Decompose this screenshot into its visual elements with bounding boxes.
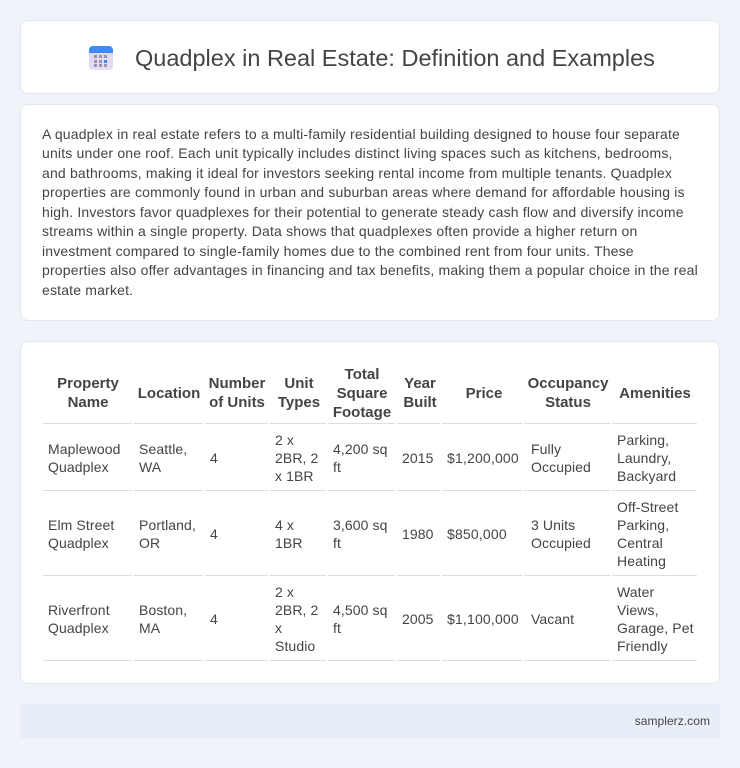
text block: description: estate market. <box>42 282 133 298</box>
row: Elm Street Quadplex: 4 x <box>275 517 294 533</box>
row: Riverfront Quadplex: ft <box>333 620 341 636</box>
row: Maplewood Quadplex: Laundry, <box>617 450 671 466</box>
row: Riverfront Quadplex: MA <box>139 620 160 636</box>
row: Riverfront Quadplex: Garage, Pet <box>617 620 694 636</box>
row: Elm Street Quadplex: 3,600 sq <box>333 517 388 533</box>
table rows <box>43 423 697 661</box>
row: Riverfront Quadplex: Water <box>617 584 654 600</box>
table header: Footage <box>333 404 391 421</box>
row: Riverfront Quadplex: Boston, <box>139 602 187 618</box>
table header: Types <box>278 394 320 411</box>
row: Maplewood Quadplex: Occupied <box>531 459 591 475</box>
row: Elm Street Quadplex: Central <box>617 535 663 551</box>
title: Quadplex in Real Estate: Definition and Examples <box>135 45 655 71</box>
row: Maplewood Quadplex <box>48 432 676 484</box>
row: Elm Street Quadplex: Portland, <box>139 517 196 533</box>
table header: Amenities <box>619 385 691 402</box>
row: Elm Street Quadplex: 4 <box>210 526 218 542</box>
table header: Location <box>138 385 200 402</box>
table header: Unit <box>284 375 314 392</box>
row: Maplewood Quadplex: $1,200,000 <box>447 450 519 466</box>
panel: header card <box>20 20 720 94</box>
row: Riverfront Quadplex: 2 x <box>275 584 294 600</box>
row: Maplewood Quadplex: 2BR, 2 <box>275 450 318 466</box>
row: Elm Street Quadplex: Quadplex <box>48 535 109 551</box>
row: Riverfront Quadplex: Friendly <box>617 638 668 654</box>
table header: Occupancy <box>528 375 608 392</box>
row: Riverfront Quadplex: Vacant <box>531 611 574 627</box>
row: Riverfront Quadplex: 2BR, 2 <box>275 602 318 618</box>
row: Riverfront Quadplex: Studio <box>275 638 315 654</box>
row: Elm Street Quadplex: Heating <box>617 553 666 569</box>
table header <box>57 366 691 421</box>
row: Riverfront Quadplex: Riverfront <box>48 602 110 618</box>
row: Riverfront Quadplex: 4 <box>210 611 218 627</box>
row: Maplewood Quadplex: Quadplex <box>48 459 109 475</box>
table header: Status <box>545 394 591 411</box>
row: Elm Street Quadplex: Off-Street <box>617 499 678 515</box>
text block: description: streams within a single property. Data shows that quadplexes often provide a higher return on <box>42 223 637 239</box>
row: Elm Street Quadplex: ft <box>333 535 341 551</box>
row: Elm Street Quadplex: 3 Units <box>531 517 575 533</box>
panel: description <box>20 104 720 321</box>
row: Elm Street Quadplex: Occupied <box>531 535 591 551</box>
text block: description: and bathrooms, making it ideal for investors seeking rental income from multiple tenants. Quadplex <box>42 165 672 181</box>
table header: Property <box>57 375 119 392</box>
table header: Price <box>466 385 502 402</box>
row: Elm Street Quadplex: OR <box>139 535 160 551</box>
row: Elm Street Quadplex: 1980 <box>402 526 434 542</box>
icon: calendar <box>89 46 113 70</box>
footer text: samplerz.com <box>635 714 710 728</box>
text block: description: investment compared to single-family homes due to the combined rent from four units. These <box>42 243 634 259</box>
row: Elm Street Quadplex <box>48 499 678 569</box>
table header: Square <box>337 385 387 402</box>
panel: property table <box>20 341 720 684</box>
row: Elm Street Quadplex: Parking, <box>617 517 669 533</box>
row: Riverfront Quadplex: $1,100,000 <box>447 611 519 627</box>
row: Riverfront Quadplex: Quadplex <box>48 620 109 636</box>
text block: description: properties also offer advantages in financing and tax benefits, making them a popular choice in the real <box>42 262 698 278</box>
row: Maplewood Quadplex: 2015 <box>402 450 434 466</box>
row: Maplewood Quadplex: 4 <box>210 450 218 466</box>
text block: description <box>42 126 698 298</box>
row: Riverfront Quadplex <box>48 584 694 654</box>
row: Maplewood Quadplex: WA <box>139 459 161 475</box>
row: Maplewood Quadplex: ft <box>333 459 341 475</box>
row: Riverfront Quadplex: 2005 <box>402 611 434 627</box>
table header: Year <box>404 375 436 392</box>
row: Maplewood Quadplex: Parking, <box>617 432 669 448</box>
row: Maplewood Quadplex: x 1BR <box>275 468 314 484</box>
table header: Built <box>403 394 437 411</box>
row: Maplewood Quadplex: Fully <box>531 441 561 457</box>
footer bar <box>20 704 720 738</box>
text block: description: A quadplex in real estate refers to a multi-family residential building designed to house four separate <box>42 126 680 142</box>
row: Elm Street Quadplex: 1BR <box>275 535 303 551</box>
text block: description: properties are commonly found in urban and suburban areas where demand for affordable housing is <box>42 184 685 200</box>
row: Riverfront Quadplex: 4,500 sq <box>333 602 388 618</box>
row: Elm Street Quadplex: Elm Street <box>48 517 114 533</box>
row: Riverfront Quadplex: Views, <box>617 602 659 618</box>
row: Riverfront Quadplex: x <box>275 620 282 636</box>
table header: Name <box>68 394 108 411</box>
row: Maplewood Quadplex: Maplewood <box>48 441 120 457</box>
text block: description: units under one roof. Each unit typically includes distinct living spaces such as kitchens, bedrooms, <box>42 145 673 161</box>
text block: description: high. Investors favor quadplexes for their potential to generate steady cash flow and diversify income <box>42 204 684 220</box>
row: Maplewood Quadplex: 4,200 sq <box>333 441 388 457</box>
row: Maplewood Quadplex: Seattle, <box>139 441 187 457</box>
table header: Total <box>345 366 379 383</box>
table header: Number <box>209 375 265 392</box>
table header: of Units <box>209 394 265 411</box>
row: Maplewood Quadplex: 2 x <box>275 432 294 448</box>
row: Elm Street Quadplex: $850,000 <box>447 526 507 542</box>
row: Maplewood Quadplex: Backyard <box>617 468 676 484</box>
